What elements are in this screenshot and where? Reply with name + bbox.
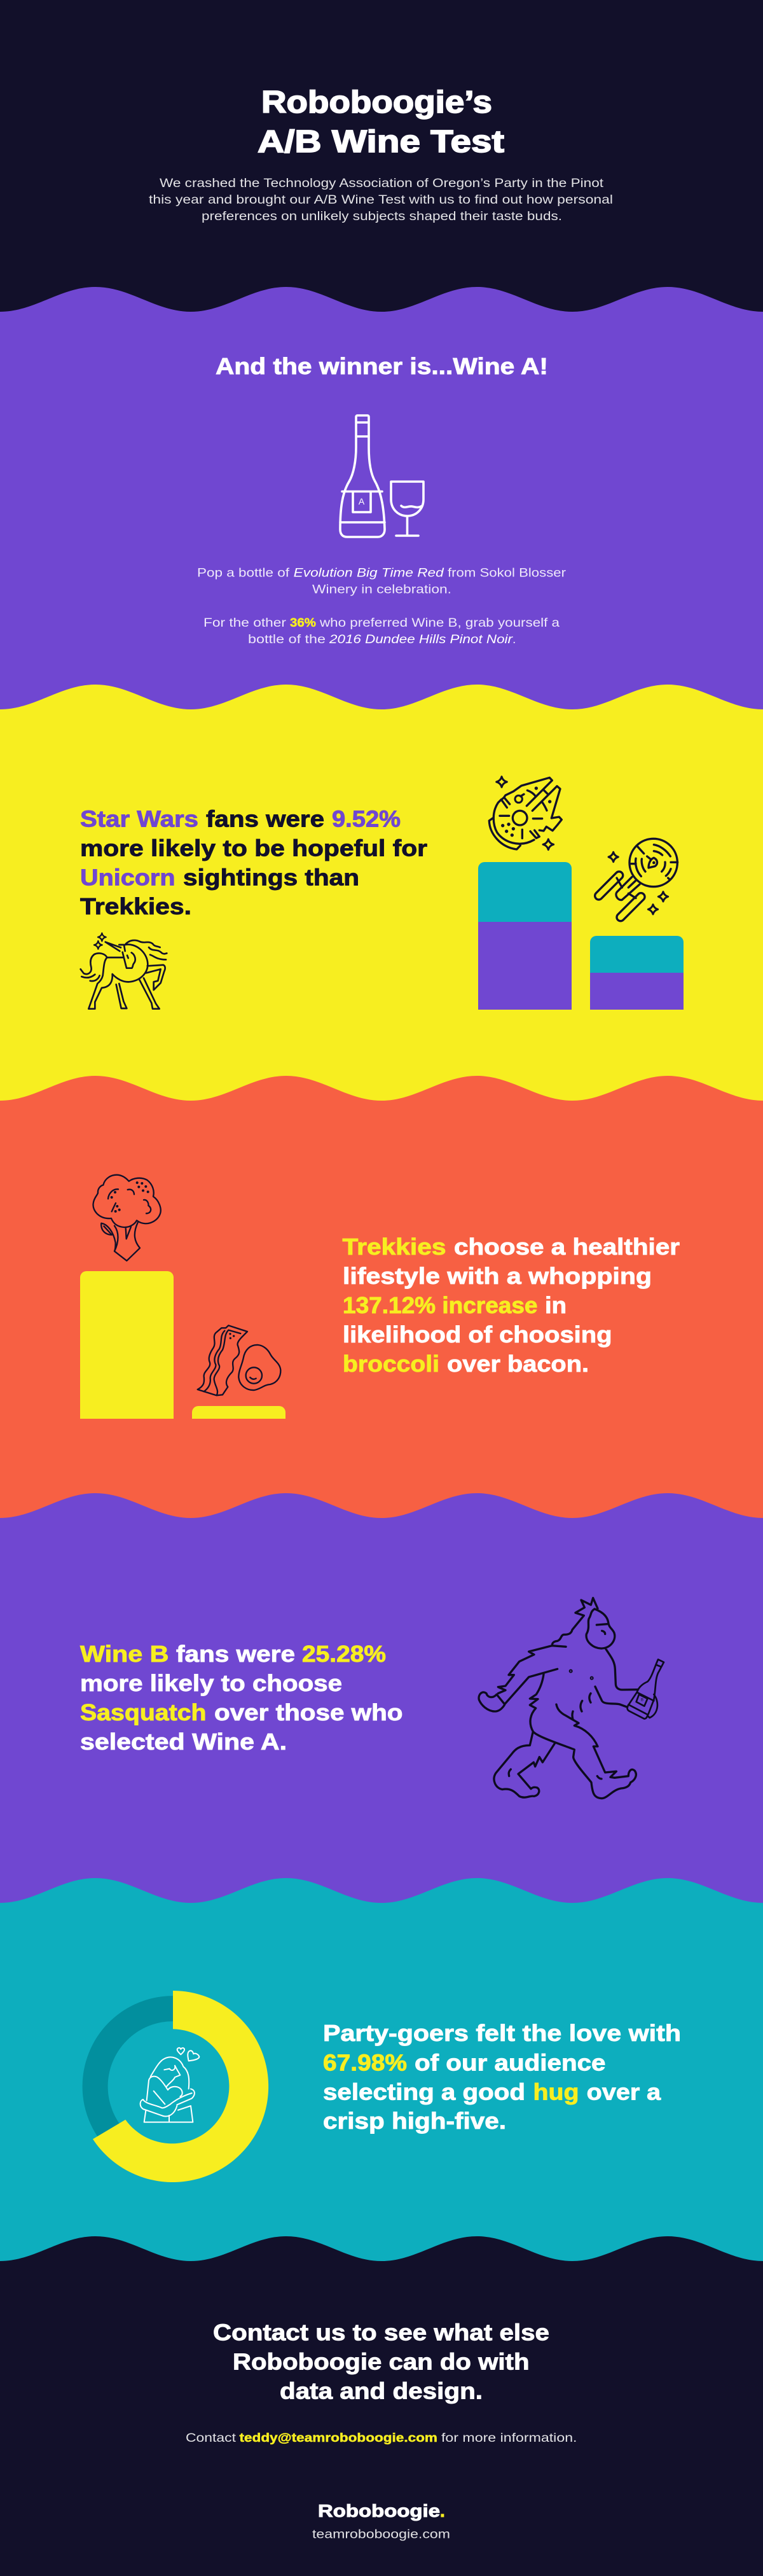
hug statement <box>323 2020 681 2134</box>
logo wordmark: . <box>440 2501 445 2521</box>
winner paragraph two: who preferred Wine B, grab yourself a <box>319 616 560 630</box>
sasquatch statement: 25.28% <box>302 1641 386 1667</box>
trekkies statement: over bacon. <box>447 1351 589 1377</box>
title <box>258 85 504 159</box>
winner paragraph one <box>197 566 567 597</box>
trekkies statement: 137.12% increase <box>343 1292 538 1318</box>
winner paragraph two: bottle of the <box>248 632 326 646</box>
title: A/B Wine Test <box>258 125 504 159</box>
icon: starship enterprise <box>593 839 678 922</box>
panel: contact footer <box>0 2236 763 2576</box>
winner paragraph one: Pop a bottle of <box>197 566 290 580</box>
footer wave background <box>0 2236 763 2576</box>
contact heading: Contact us to see what else <box>213 2320 549 2345</box>
panel: broccoli vs bacon <box>0 1076 763 1527</box>
sasquatch statement: fans were <box>176 1641 295 1667</box>
bar: star wars fans <box>478 862 572 1010</box>
icon: sasquatch with wine bottle <box>479 1598 664 1799</box>
panel: intro header <box>0 0 763 312</box>
panel: star wars vs trekkies <box>0 685 763 1107</box>
winner paragraph one: from Sokol Blosser <box>448 566 567 580</box>
panel: hug <box>0 1878 763 2265</box>
bar: bacon <box>192 1406 285 1419</box>
star wars statement: 9.52% <box>332 805 401 832</box>
winner paragraph two: 2016 Dundee Hills Pinot Noir <box>329 632 514 646</box>
panel: winner <box>0 287 763 713</box>
contact line <box>186 2431 577 2445</box>
logo wordmark: Roboboogie <box>318 2501 440 2521</box>
hug statement: crisp high-five. <box>323 2108 506 2134</box>
winner paragraph two: For the other <box>203 616 287 630</box>
trekkies statement: in <box>545 1292 567 1318</box>
star wars statement: fans were <box>206 805 324 832</box>
icon: sasquatch with wine bottle: B <box>641 1699 643 1702</box>
star wars statement: Unicorn <box>80 864 175 891</box>
winner paragraph one: Evolution Big Time Red <box>294 566 444 580</box>
intro paragraph: this year and brought our A/B Wine Test with us to find out how personal <box>149 193 613 207</box>
winner wave background <box>0 287 763 713</box>
contact line: for more information. <box>441 2431 577 2445</box>
trekkies statement: broccoli <box>343 1351 439 1377</box>
sasquatch statement: Sasquatch <box>80 1699 206 1725</box>
contact heading: Roboboogie can do with <box>233 2349 529 2374</box>
donut chart: 67.98% hug <box>93 1991 268 2182</box>
donut track <box>95 2009 251 2164</box>
trekkies statement: Trekkies <box>342 1234 446 1260</box>
trekkies statement <box>342 1234 680 1377</box>
contact line: Contact <box>186 2431 237 2445</box>
star wars statement: more likely to be hopeful for <box>80 835 427 861</box>
coral wave background <box>0 1076 763 1527</box>
winner paragraph two: . <box>512 632 516 646</box>
donut value arc <box>93 1991 268 2182</box>
intro paragraph: preferences on unlikely subjects shaped their taste buds. <box>202 209 562 223</box>
icon: wine bottle and glass <box>340 415 423 537</box>
contact heading <box>213 2320 549 2404</box>
website url: teamroboboogie.com <box>312 2527 450 2541</box>
title: Roboboogie’s <box>261 85 492 120</box>
contact line: teddy@teamroboboogie.com <box>239 2431 437 2445</box>
hug statement: 67.98% <box>323 2050 407 2075</box>
hug statement: of our audience <box>415 2050 605 2075</box>
star wars statement: Trekkies. <box>80 893 191 919</box>
sasquatch statement <box>80 1641 403 1755</box>
icon: bacon and egg <box>198 1325 280 1395</box>
sasquatch statement: over those who <box>214 1699 403 1725</box>
intro background <box>0 0 763 312</box>
panel: sasquatch <box>0 1493 763 1909</box>
hug statement: Party-goers felt the love with <box>323 2020 681 2046</box>
winner paragraph two: 36% <box>290 616 316 630</box>
bar chart: star wars vs trek <box>478 862 684 1010</box>
purple wave background <box>0 1493 763 1909</box>
winner heading: And the winner is...Wine A! <box>216 353 548 379</box>
teal wave background <box>0 1878 763 2265</box>
sasquatch statement: selected Wine A. <box>80 1729 287 1755</box>
icon: millennium falcon <box>489 777 561 850</box>
trekkies statement: lifestyle with a whopping <box>343 1263 652 1289</box>
winner paragraph two <box>203 616 560 646</box>
intro paragraph: We crashed the Technology Association of Oregon’s Party in the Pinot <box>160 176 604 190</box>
trekkies statement: choose a healthier <box>454 1234 680 1260</box>
hug statement: over a <box>587 2079 661 2105</box>
icon: people hugging <box>141 2048 199 2122</box>
trekkies statement: likelihood of choosing <box>343 1321 612 1347</box>
icon: unicorn <box>81 933 167 1009</box>
icon: wine bottle and glass: A <box>359 496 365 506</box>
sasquatch statement: more likely to choose <box>80 1670 342 1696</box>
hug statement: hug <box>533 2079 579 2105</box>
contact heading: data and design. <box>280 2378 483 2404</box>
sasquatch statement: Wine B <box>80 1641 169 1667</box>
icon: broccoli <box>93 1175 161 1261</box>
yellow wave background <box>0 685 763 1107</box>
intro paragraph <box>149 176 613 223</box>
winner paragraph one: Winery in celebration. <box>312 583 451 597</box>
star wars statement: Star Wars <box>80 805 198 832</box>
bar: trekkies <box>590 936 684 1010</box>
star wars statement <box>80 805 427 919</box>
star wars statement: sightings than <box>183 864 359 891</box>
bar: broccoli <box>80 1271 174 1419</box>
hug statement: selecting a good <box>323 2079 525 2105</box>
